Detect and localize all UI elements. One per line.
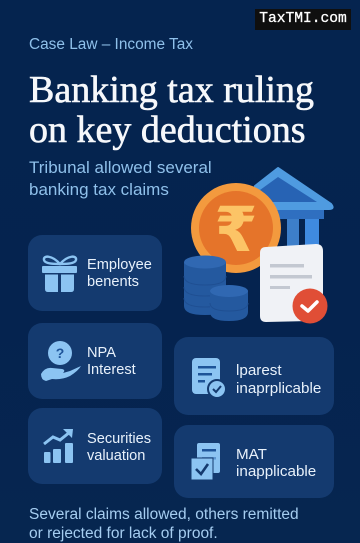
label: Securities [87,431,151,447]
label: Employee [87,257,152,273]
label [87,345,136,378]
title: Banking tax ruling [29,69,314,111]
title: on key deductions [29,109,306,151]
label: Interest [87,362,136,378]
category label: Case Law – Income Tax [29,36,193,53]
footer text: Several claims allowed, others remitted [29,506,299,523]
illustration: bank, rupee coin, coins, document [184,167,334,324]
label: benents [87,274,139,290]
icon: hand with question mark: ? [56,345,64,361]
icon: rupee coin: ₹ [214,193,258,266]
icon: rupee coin [191,183,281,273]
label: MAT [236,446,267,463]
footer text [29,506,299,542]
icon: bank [230,168,333,249]
icon: hand with question mark [41,341,81,381]
subtitle: Tribunal allowed several [29,158,212,177]
label: NPA [87,345,116,361]
footer text: or rejected for lack of proof. [29,525,218,542]
icon: small coin stack [210,285,248,321]
label [236,362,321,397]
icon: large coin stack [184,256,226,315]
logo: TaxTMI.com: TaxTMI.com [259,11,347,27]
label [87,257,152,290]
icon: documents with checkbox [192,443,220,480]
panel: securities valuation [28,408,162,484]
subtitle [29,158,212,199]
label [87,431,151,464]
panel: NPA interest [28,323,162,399]
label: lparest [236,362,282,379]
icon: rising bar chart [43,429,73,463]
logo: TaxTMI.com [255,9,351,30]
icon: document with check [260,244,328,324]
subtitle: banking tax claims [29,180,169,199]
panel: MAT inapplicable [174,425,334,498]
label: inapplicable [236,463,316,480]
label: valuation [87,448,145,464]
icon: document with check [192,358,225,397]
panel: interest inapplicable [174,337,334,415]
icon: gift [42,255,78,292]
label [236,446,316,480]
panel: employee benefits [28,235,162,311]
title [29,69,314,151]
label: inaprplicable [236,380,321,397]
